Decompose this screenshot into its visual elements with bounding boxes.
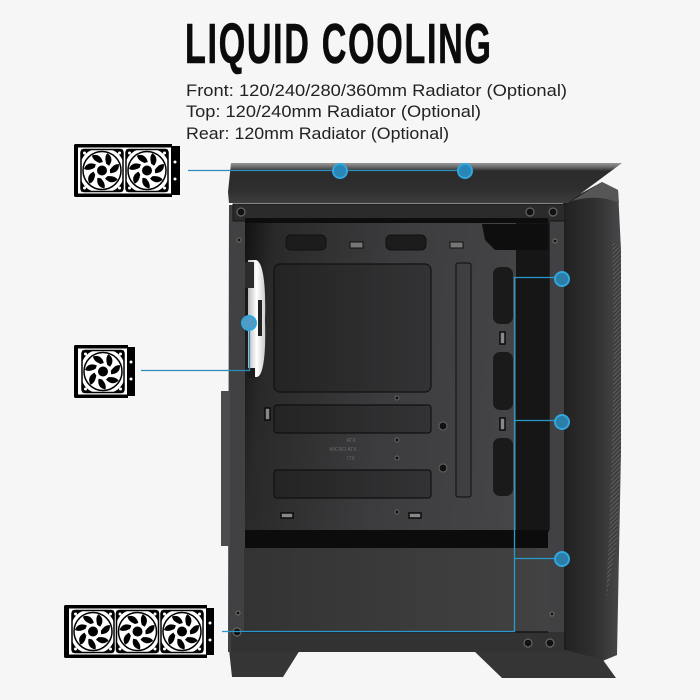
feet: [228, 640, 616, 678]
form factor labels: ATX: [346, 438, 356, 444]
screws: [233, 208, 557, 647]
callout: rear radiator: [141, 316, 256, 370]
radiator support text: [186, 81, 567, 143]
cpu cutout: [274, 264, 431, 392]
top panel: [228, 163, 622, 203]
lower cutouts: [274, 405, 431, 498]
psu shroud: [244, 548, 549, 632]
radiator support text: Top: 120/240mm Radiator (Optional): [186, 102, 481, 121]
PC case: [221, 163, 622, 678]
rear bracket: [221, 391, 230, 546]
bottom rail: [231, 632, 566, 652]
vertical strip: [456, 263, 471, 497]
icon: dual fan radiator: [74, 144, 180, 197]
side frame: [228, 205, 566, 652]
callout: top radiator: [188, 164, 472, 178]
rear white fan: [245, 260, 265, 378]
form factor labels: ITX: [347, 456, 356, 462]
callout: front radiator: [222, 272, 569, 632]
cable holes right: [493, 267, 513, 496]
bottom vent: [245, 530, 548, 548]
standoffs: [395, 396, 447, 514]
frame seam lines: [231, 205, 565, 650]
radiator support text: Rear: 120mm Radiator (Optional): [186, 124, 449, 143]
form factor labels: [329, 438, 357, 462]
right dark cable bay: [516, 222, 549, 532]
top rail: [233, 204, 565, 223]
power supply corner: [482, 224, 549, 250]
icon: single fan radiator: [74, 345, 135, 398]
icon: triple fan radiator: [64, 605, 214, 658]
interior motherboard tray: [245, 222, 548, 530]
radiator support text: Front: 120/240/280/360mm Radiator (Optional): [186, 81, 567, 100]
title: LIQUID COOLING: [185, 11, 491, 75]
form factor labels: MICRO ATX: [329, 447, 357, 453]
cable holes top: [286, 235, 463, 250]
front bezel: [560, 182, 621, 665]
small tie slots: [265, 332, 505, 518]
